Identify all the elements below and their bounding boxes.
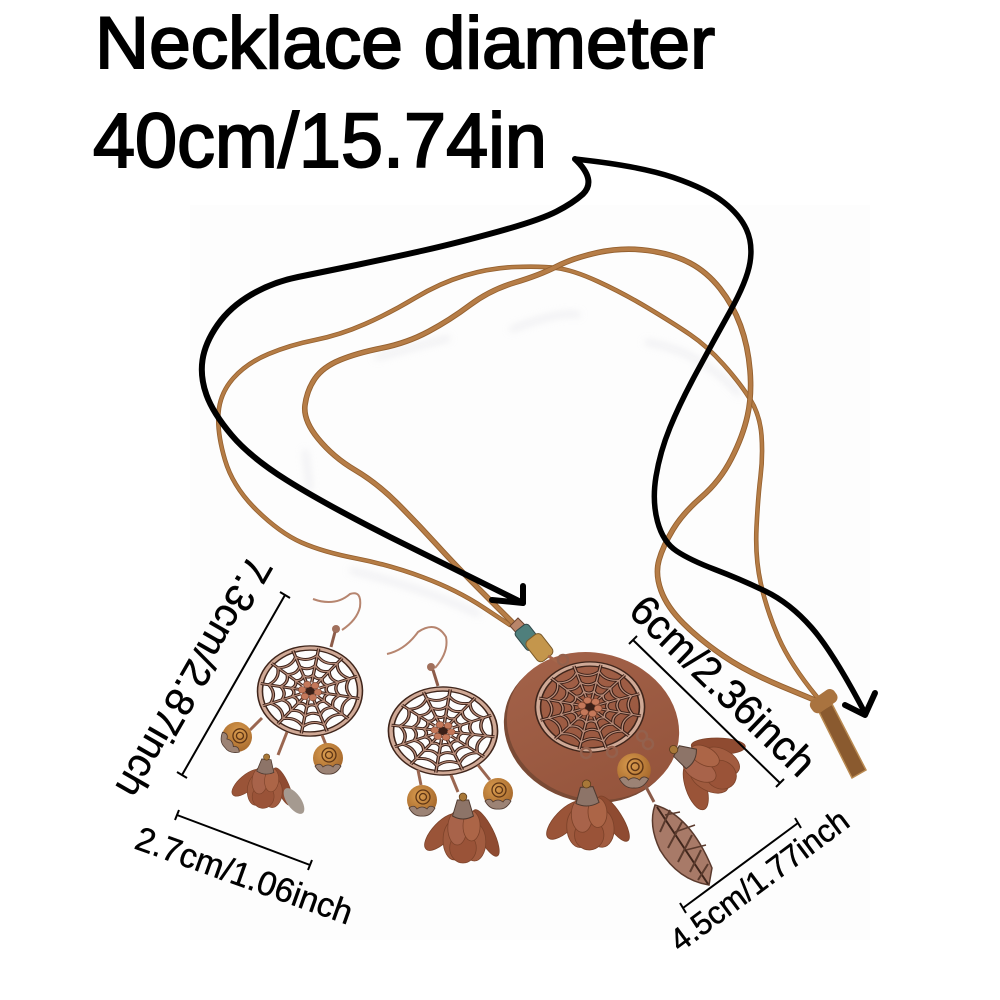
pendant: drops [538, 655, 755, 885]
left earring flower [226, 751, 301, 811]
left earring dreamcatcher [252, 641, 368, 741]
right earring hook [387, 627, 447, 686]
dimension: pendant width: 6cm/2.36inch [621, 586, 825, 785]
cord knot and tail [808, 687, 866, 778]
pendant flower left [538, 778, 635, 852]
necklace cords [218, 249, 817, 701]
pendant: dreamcatcher [528, 656, 652, 758]
pendant bead [617, 753, 651, 788]
pendant: wood disc [487, 633, 696, 822]
right earring beads [407, 785, 437, 816]
title: Necklace diameter [95, 3, 715, 84]
title: 40cm/15.74in [93, 98, 547, 184]
left earring leaf [280, 785, 308, 817]
left earring [215, 593, 368, 817]
left earring hook [313, 593, 360, 647]
left earring beads [215, 716, 258, 759]
title [93, 3, 715, 184]
pendant feather [645, 785, 712, 885]
right earring flower [419, 793, 504, 863]
measurement arrow [202, 159, 875, 715]
pendant flower right [648, 709, 755, 823]
soft shadows under cords [305, 314, 740, 615]
necklace beads [510, 618, 565, 666]
right earring [384, 627, 513, 863]
dimension: earring width: 2.7cm/1.06inch [130, 820, 358, 932]
pendant jump rings [558, 655, 653, 758]
dimension: pendant drop: 4.5cm/1.77inch [663, 802, 856, 959]
right earring dreamcatcher [384, 684, 502, 778]
dimension: earring length: 7.3cm/2.87inch [107, 548, 280, 805]
background photo area [190, 205, 870, 940]
